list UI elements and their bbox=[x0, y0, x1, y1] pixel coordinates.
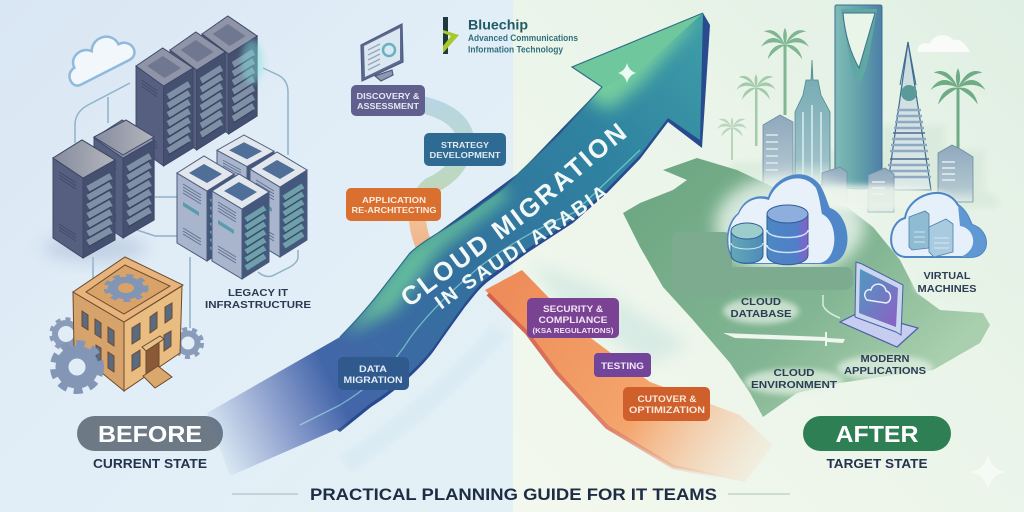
icon: cloud database bbox=[727, 174, 848, 265]
icon: server racks middle row bbox=[43, 120, 154, 262]
step: security and compliance: SECURITY & bbox=[543, 304, 604, 314]
icon: stepped tower bbox=[795, 60, 830, 185]
step: strategy development bbox=[424, 133, 506, 166]
after badge bbox=[803, 416, 951, 471]
label: legacy IT infrastructure: LEGACY IT bbox=[228, 287, 289, 299]
step: security and compliance: COMPLIANCE bbox=[538, 315, 608, 325]
footer heading: PRACTICAL PLANNING GUIDE FOR IT TEAMS bbox=[310, 486, 717, 504]
label: virtual machines: VIRTUAL bbox=[924, 270, 971, 282]
before badge: CURRENT STATE bbox=[93, 456, 207, 471]
step: discovery and assessment: ASSESSMENT bbox=[357, 101, 420, 111]
icon: roof gear bbox=[106, 276, 146, 300]
map patch bbox=[672, 232, 853, 297]
icon: kingdom tower bbox=[835, 5, 882, 189]
step: discovery and assessment bbox=[351, 85, 425, 116]
step: security and compliance: (KSA REGULATIONS) bbox=[532, 326, 614, 335]
step: data migration bbox=[338, 357, 409, 390]
pale band above orange ribbon bbox=[530, 262, 690, 365]
icon: legacy building bbox=[73, 257, 183, 391]
logo: Bluechip: Bluechip bbox=[468, 16, 528, 32]
step: cutover and optimization bbox=[623, 387, 710, 421]
arrow title: CLOUD MIGRATION bbox=[402, 122, 627, 304]
label: modern applications bbox=[844, 353, 926, 377]
step: strategy development: DEVELOPMENT bbox=[430, 150, 501, 160]
step: testing bbox=[594, 353, 651, 377]
icon: modern application laptop bbox=[840, 262, 918, 347]
label halos bbox=[723, 272, 981, 395]
icon: corner sparkle bbox=[971, 454, 1005, 490]
after badge: AFTER bbox=[836, 421, 919, 447]
icon: light server racks bbox=[177, 135, 307, 279]
label: virtual machines: MACHINES bbox=[918, 283, 976, 295]
lower orange ribbon bbox=[485, 270, 773, 482]
before badge bbox=[77, 416, 223, 471]
icon: grey building bbox=[763, 115, 793, 190]
arrow title: IN SAUDI ARABIA bbox=[434, 187, 608, 310]
icon: large gear bbox=[53, 343, 101, 391]
label: cloud database: CLOUD bbox=[741, 296, 781, 308]
label: legacy IT infrastructure bbox=[205, 287, 311, 311]
icon: virtual machines cloud bbox=[891, 193, 986, 257]
panel: legacy IT infrastructure bbox=[43, 16, 311, 391]
logo: Bluechip: Information Technology bbox=[468, 44, 564, 56]
panel: Riyadh skyline bbox=[717, 5, 1000, 212]
icon: legacy cloud bbox=[59, 27, 137, 88]
icon: back gear bbox=[51, 319, 81, 349]
label: legacy IT infrastructure: INFRASTRUCTURE bbox=[205, 299, 311, 311]
step: application re-architecting bbox=[346, 188, 441, 221]
step: application re-architecting: APPLICATION bbox=[362, 195, 426, 205]
before badge: BEFORE bbox=[98, 421, 202, 447]
step: testing: TESTING bbox=[601, 361, 644, 372]
logo: Bluechip bbox=[443, 16, 578, 56]
panel: Saudi Arabia map bbox=[623, 158, 990, 417]
step: data migration: DATA bbox=[359, 364, 388, 374]
step: cutover and optimization: CUTOVER & bbox=[638, 394, 697, 404]
icon: background blocks bbox=[730, 125, 1000, 208]
icon: palm trees bbox=[717, 28, 986, 160]
label: cloud database: DATABASE bbox=[730, 308, 792, 320]
logo: Bluechip: Advanced Communications bbox=[468, 33, 578, 44]
icon: small buildings bbox=[822, 145, 973, 212]
step: cutover and optimization: OPTIMIZATION bbox=[629, 405, 705, 415]
label: cloud database bbox=[730, 296, 792, 320]
icon: right gear bbox=[174, 329, 202, 357]
step: strategy development: STRATEGY bbox=[441, 140, 489, 150]
connector lines bbox=[75, 68, 298, 328]
skyline base glow bbox=[780, 185, 950, 211]
step: discovery and assessment: DISCOVERY & bbox=[356, 91, 420, 101]
icon: sword bbox=[723, 332, 845, 346]
arrow shadow band bbox=[345, 330, 500, 465]
label: modern applications: APPLICATIONS bbox=[844, 365, 926, 377]
step: data migration: MIGRATION bbox=[344, 375, 402, 385]
icon: faisaliah tower bbox=[887, 42, 931, 190]
label: cloud environment: ENVIRONMENT bbox=[751, 379, 838, 391]
icon: arrow sparkle bbox=[618, 63, 636, 83]
label: cloud environment: CLOUD bbox=[774, 367, 815, 379]
icon: discovery monitor bbox=[361, 24, 403, 81]
step: application re-architecting: RE-ARCHITECTING bbox=[352, 205, 437, 215]
label: modern applications: MODERN bbox=[860, 353, 910, 365]
map glow bbox=[715, 175, 865, 275]
upper ribbon path bbox=[415, 103, 466, 246]
icon: white cloud bbox=[918, 35, 970, 52]
icon: server racks back row bbox=[136, 16, 263, 166]
connector line bbox=[823, 295, 840, 318]
step: security and compliance bbox=[527, 298, 619, 338]
label: cloud environment bbox=[751, 367, 838, 391]
after badge: TARGET STATE bbox=[826, 456, 928, 471]
label: virtual machines bbox=[918, 270, 976, 295]
main migration arrow bbox=[207, 13, 710, 476]
